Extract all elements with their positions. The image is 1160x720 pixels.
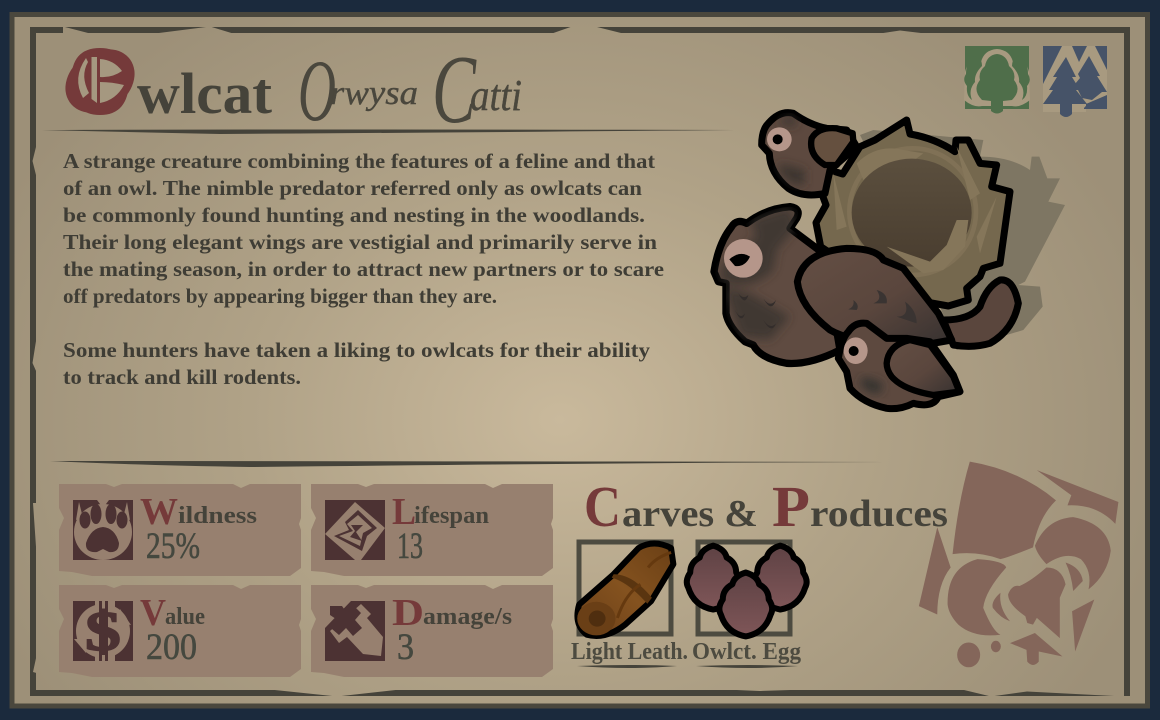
icon: hourglass — [325, 500, 385, 560]
description text: Their long elegant wings are vestigial and primarily serve in — [63, 230, 657, 254]
title divider — [42, 130, 735, 134]
description text — [63, 149, 664, 389]
adult tail — [943, 280, 1018, 346]
stat: wildness: 25% — [146, 526, 200, 567]
latin name: C — [432, 36, 477, 144]
stat: wildness — [59, 484, 301, 576]
heading: carves and produces: P — [772, 474, 810, 539]
bottom chick — [838, 323, 960, 409]
illustration: owlcat family and nest — [714, 113, 1065, 409]
description text: A strange creature combining the features of a feline and that — [63, 149, 655, 173]
description text: to track and kill rodents. — [63, 365, 301, 389]
stat: damage: 3 — [397, 627, 414, 668]
stat: lifespan — [311, 484, 553, 576]
item: light leather — [571, 542, 688, 668]
description text: off predators by appearing bigger than they are. — [63, 284, 497, 308]
item label: Light Leath. — [571, 639, 688, 665]
item: owlcat egg — [687, 542, 807, 668]
heading: carves and produces: C — [584, 474, 621, 539]
nest shadow — [860, 130, 1065, 350]
stat: value: 200 — [146, 627, 197, 668]
stat: damage: amage/s — [423, 604, 512, 630]
item label: Owlct. Egg — [692, 639, 801, 665]
icon: paw — [73, 500, 133, 560]
stat: wildness: ildness — [178, 503, 257, 529]
title — [53, 25, 273, 136]
lower divider — [50, 461, 885, 467]
stat: damage: D — [392, 592, 424, 634]
description text: the mating season, in order to attract new partners or to scare — [63, 257, 664, 281]
icon: boreal habitat — [1043, 46, 1107, 117]
title initial: O — [67, 25, 133, 136]
emblem: fleur-de-lis — [919, 462, 1118, 667]
description text: of an owl. The nimble predator referred only as owlcats can — [63, 176, 642, 200]
adult owlcat — [714, 207, 952, 363]
stat: value: V — [140, 592, 167, 634]
top chick — [762, 113, 857, 195]
icon: eggs — [687, 546, 807, 636]
stat: lifespan: ifespan — [414, 503, 489, 529]
heading: carves and produces: roduces — [810, 493, 948, 535]
latin name — [298, 36, 522, 144]
heading: carves and produces: arves & — [622, 493, 758, 535]
icon: coin: $ — [85, 601, 121, 663]
description text: be commonly found hunting and nesting in the woodlands. — [63, 203, 645, 227]
icon: leather roll — [577, 543, 673, 636]
latin name: rwysa — [330, 75, 418, 112]
latin name: O — [298, 43, 336, 140]
title: wlcat — [137, 61, 273, 126]
stat: lifespan: 13 — [397, 526, 423, 567]
icon: woodland habitat — [964, 46, 1030, 114]
latin name: atti — [470, 71, 522, 120]
nest — [816, 120, 1010, 306]
stat: value: alue — [165, 604, 205, 630]
stat: value — [59, 585, 301, 677]
stat: wildness: W — [140, 491, 178, 533]
icon: coin — [73, 601, 133, 663]
stat: damage — [311, 585, 553, 677]
icon: sword — [325, 601, 385, 661]
description text: Some hunters have taken a liking to owlcats for their ability — [63, 338, 651, 362]
heading: carves and produces — [584, 474, 948, 539]
stat: lifespan: L — [392, 491, 416, 533]
